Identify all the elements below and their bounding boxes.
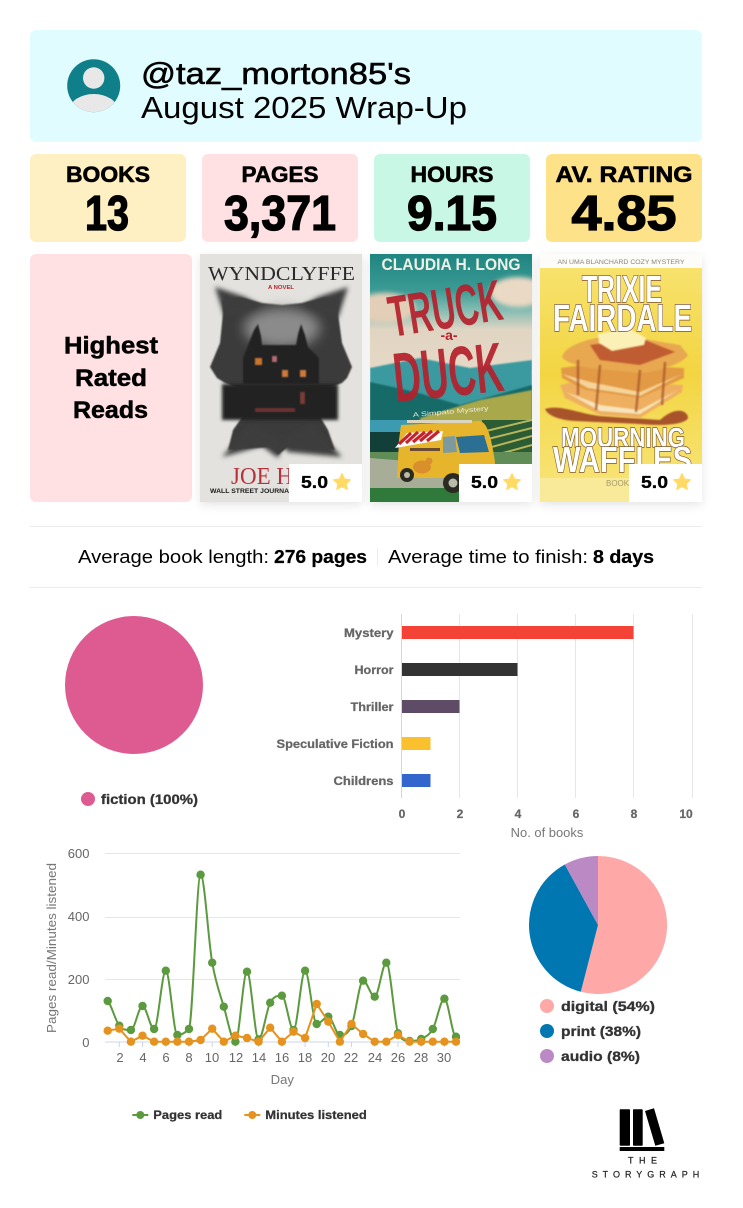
x axis labels: 4: [139, 1050, 147, 1065]
icon: star: [334, 474, 350, 490]
book cover: Truck-a-Duck: A Simpato Mystery: [413, 405, 490, 419]
book cover: Wyndclyffe: A NOVEL: [268, 285, 294, 291]
book cover: Mourning Waffles: TRIXIE: [582, 269, 662, 311]
legend: audio: audio (8%): [561, 1048, 640, 1064]
x axis labels: 18: [298, 1050, 312, 1065]
category labels: Mystery: [344, 626, 394, 640]
stat card: average rating: [546, 154, 702, 242]
chart: daily pages and minutes line chart: [44, 846, 460, 1122]
icon: star: [674, 474, 690, 490]
logo: The StoryGraph: STORYGRAPH: [592, 1170, 699, 1180]
series: pages read: [108, 875, 456, 1042]
chart: format pie: [529, 856, 667, 1064]
book cover: Wyndclyffe: [200, 254, 362, 505]
category labels: [276, 626, 394, 788]
text: average book length and time to finish: Average time to finish:: [388, 547, 588, 567]
book cover: Wyndclyffe: WYNDCLYFFE: [208, 263, 355, 285]
chart: genres bar chart: [276, 614, 693, 840]
x axis labels: 26: [391, 1050, 405, 1065]
stat card: hours: HOURS: [410, 162, 494, 187]
category labels: Childrens: [334, 774, 394, 788]
username heading: @taz_morton85's: [141, 56, 411, 91]
value axis labels: 2: [457, 807, 464, 821]
value axis labels: 8: [631, 807, 638, 821]
x axis labels: [116, 1050, 451, 1065]
category labels: Horror: [354, 663, 394, 677]
x axis labels: 24: [368, 1050, 382, 1065]
stat card: books: [30, 154, 186, 242]
value axis labels: 4: [515, 807, 522, 821]
text: average book length and time to finish: Average book length:: [78, 547, 269, 567]
rating badge: Wyndclyffe: 5.0: [301, 472, 328, 492]
text: average book length and time to finish: [78, 547, 654, 567]
text: average book length and time to finish: 276 pages: [274, 547, 367, 567]
icon: star: [504, 474, 520, 490]
book cover: Mourning Waffles: MOURNING: [561, 422, 685, 453]
y axis labels: 600: [68, 846, 90, 861]
panel: highest rated reads: Reads: [73, 397, 148, 424]
y axis labels: [68, 846, 90, 1050]
legend: print: print (38%): [561, 1023, 641, 1039]
book cover: Mourning Waffles: [540, 254, 702, 505]
axis title: No. of books: [511, 826, 583, 840]
logo: The StoryGraph: [592, 1108, 699, 1180]
x axis labels: 28: [414, 1050, 428, 1065]
book cover: Truck-a-Duck: CLAUDIA H. LONG: [382, 255, 520, 274]
subtitle: August 2025 Wrap-Up: [141, 90, 467, 125]
book cover: Mourning Waffles: FAIRDALE: [553, 298, 692, 340]
panel: highest rated reads: Highest: [64, 332, 158, 360]
category labels: Speculative Fiction: [276, 737, 394, 751]
rating badge: Truck-a-Duck: 5.0: [471, 472, 498, 492]
x axis labels: 12: [229, 1050, 243, 1065]
book cover: Truck-a-Duck: [368, 254, 534, 507]
book cover: Mourning Waffles: WAFFLES: [553, 439, 692, 480]
legend: pages read: Pages read: [153, 1108, 222, 1122]
value axis labels: 6: [573, 807, 580, 821]
book cover: Mourning Waffles: AN UMA BLANCHARD COZY MYSTERY: [558, 259, 685, 266]
book cover: Wyndclyffe: JOE H: [231, 464, 293, 490]
book cover: Wyndclyffe: WALL STREET JOURNAL B: [210, 489, 301, 495]
rating badge: Truck-a-Duck: [459, 464, 532, 502]
chart: fiction pie: [65, 616, 203, 807]
panel: highest rated reads: Rated: [75, 365, 147, 392]
book cover: Truck-a-Duck: -a-: [440, 327, 458, 343]
y axis title: Pages read/Minutes listened: [44, 863, 59, 1033]
legend: digital: digital (54%): [561, 998, 655, 1014]
rating badge: Mourning Waffles: 5.0: [641, 472, 668, 492]
book cover: Truck-a-Duck: DUCK: [389, 328, 507, 417]
series: minutes listened: [108, 1004, 456, 1042]
x axis labels: 8: [185, 1050, 193, 1065]
book cover: Mourning Waffles: BOOK O: [606, 479, 638, 488]
x axis labels: 30: [437, 1050, 451, 1065]
rating badge: Mourning Waffles: [629, 464, 702, 502]
stat card: hours: [374, 154, 530, 242]
panel: highest rated reads: [30, 254, 192, 502]
logo: The StoryGraph: THE: [628, 1156, 657, 1166]
y axis labels: 200: [68, 972, 90, 987]
stat card: books: 13: [85, 187, 129, 241]
x axis labels: 20: [321, 1050, 335, 1065]
stat card: pages: [202, 154, 358, 242]
bars: [402, 626, 634, 787]
value axis labels: 0: [399, 807, 406, 821]
category labels: Thriller: [350, 700, 394, 714]
stat card: average rating: AV. RATING: [556, 162, 692, 187]
stat card: pages: 3,371: [224, 187, 336, 241]
text: average book length and time to finish: 8 days: [593, 547, 654, 567]
x axis labels: 2: [116, 1050, 124, 1065]
value axis labels: 10: [679, 807, 693, 821]
x axis title: Day: [271, 1072, 294, 1087]
y axis labels: 0: [82, 1035, 90, 1050]
x axis labels: 6: [162, 1050, 170, 1065]
legend: minutes listened: Minutes listened: [265, 1108, 367, 1122]
x axis labels: 10: [205, 1050, 219, 1065]
book cover: Truck-a-Duck: TRUCK: [384, 268, 507, 350]
rating badge: Wyndclyffe: [289, 464, 362, 502]
y axis labels: 400: [68, 909, 90, 924]
x axis labels: 14: [252, 1050, 266, 1065]
value axis labels: [399, 807, 693, 821]
stat card: pages: PAGES: [242, 162, 318, 187]
x axis labels: 16: [275, 1050, 289, 1065]
header panel: [30, 30, 702, 142]
stat card: books: BOOKS: [66, 162, 150, 187]
stat card: average rating: 4.85: [572, 187, 676, 241]
icon: user avatar: [67, 59, 120, 112]
stat card: hours: 9.15: [407, 187, 497, 241]
x axis labels: 22: [344, 1050, 358, 1065]
legend: fiction: fiction (100%): [101, 791, 198, 807]
